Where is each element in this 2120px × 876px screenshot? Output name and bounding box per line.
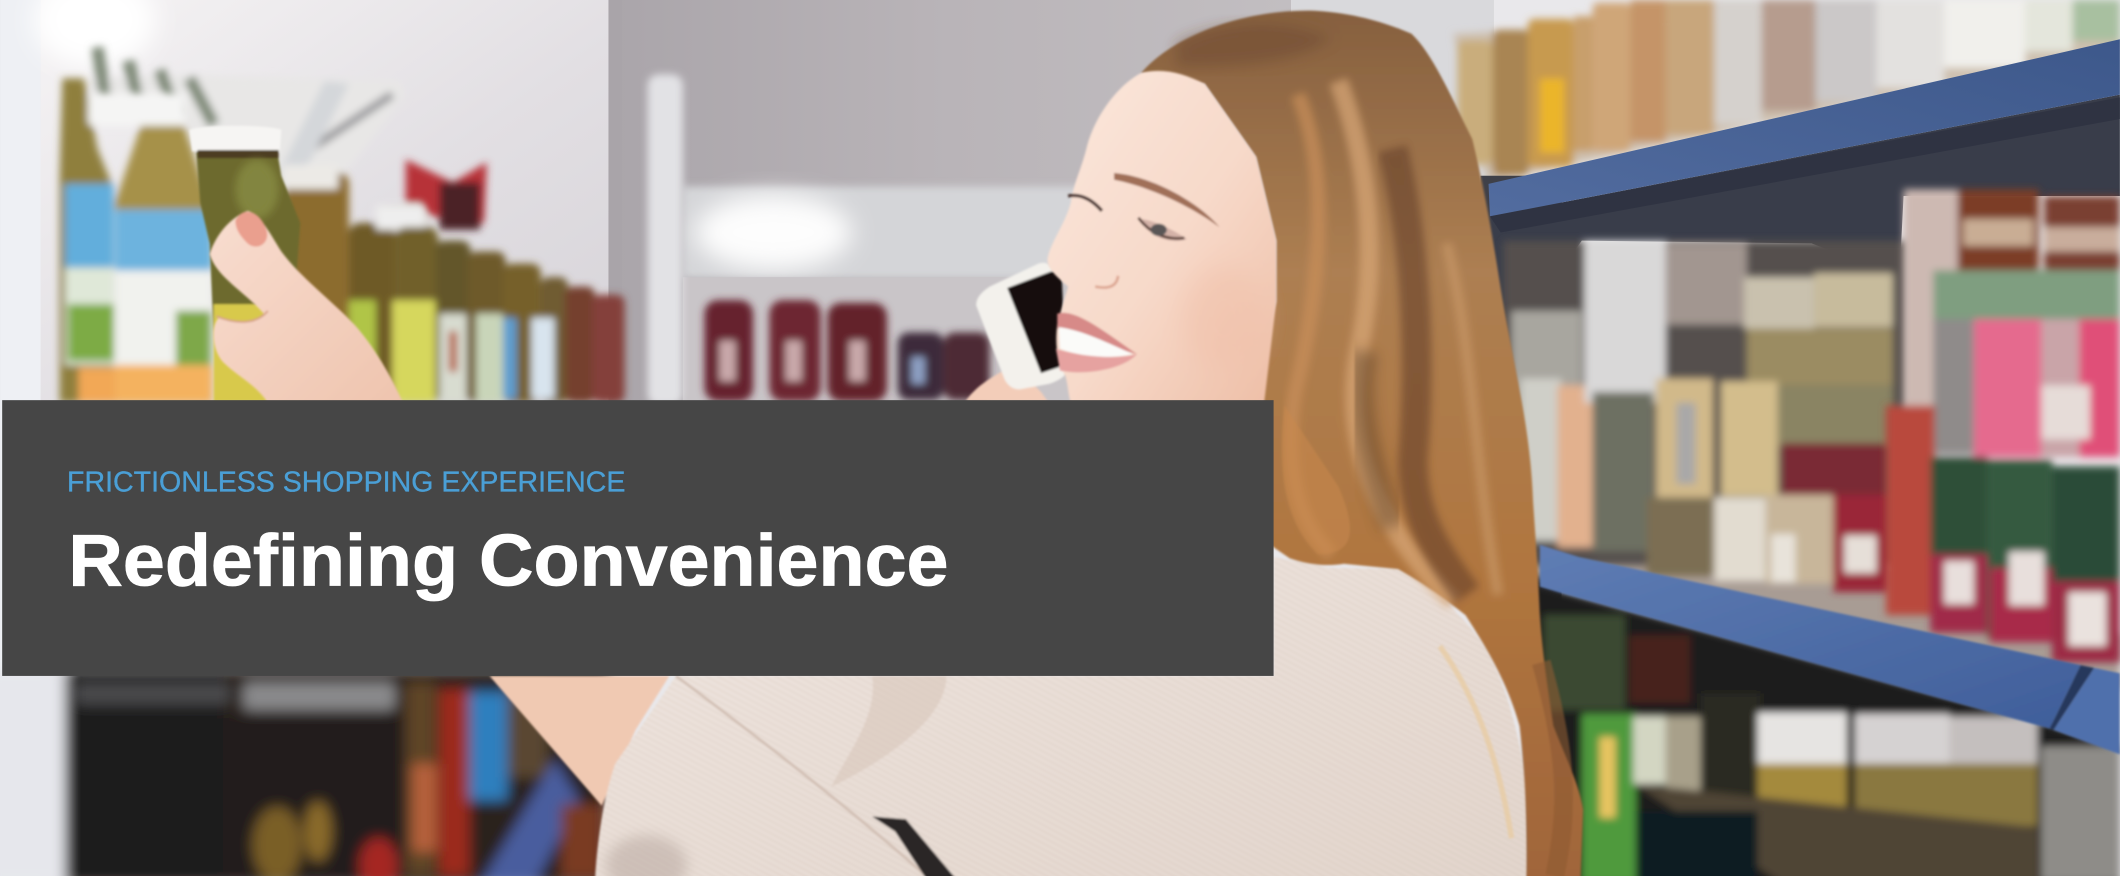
background: shelf surface under products [1528, 520, 2120, 689]
background: middle shelf products [1503, 241, 1909, 592]
phone [965, 263, 1068, 402]
woman: sweater and arm [490, 557, 1528, 876]
background: blurred dark bottles lower left [0, 669, 608, 876]
background: boxes on right side [1886, 189, 2120, 662]
subtitle: FRICTIONLESS SHOPPING EXPERIENCE [67, 466, 625, 498]
background: upper right shelf jars [1453, 0, 2120, 182]
woman: face [1047, 71, 1276, 403]
woman: hair [1141, 11, 1583, 876]
top blue shelf [1480, 39, 2120, 608]
background: blurred rack and flags upper left [89, 47, 487, 237]
jar being held [189, 126, 300, 401]
title panel [2, 400, 1274, 676]
background: blurred bottles on left shelf [60, 78, 625, 403]
lower blue shelf [1540, 545, 2120, 754]
hand holding jar [210, 211, 403, 403]
heading: Redefining Convenience [68, 520, 948, 601]
background: blurred jars on back shelf [704, 300, 990, 402]
background: bottom shelf products [1528, 581, 2120, 876]
